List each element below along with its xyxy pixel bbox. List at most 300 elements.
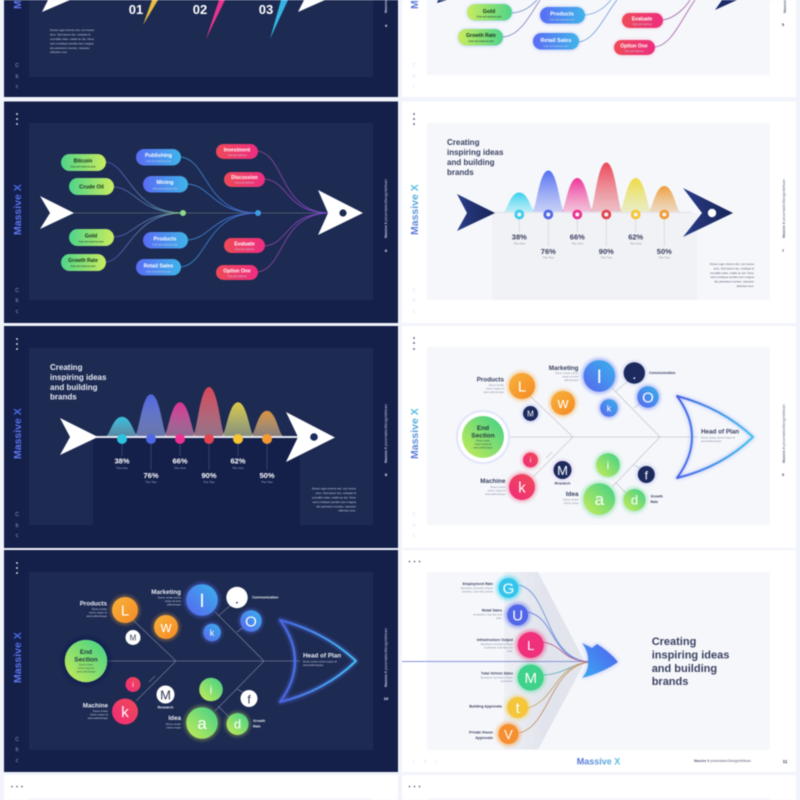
footer nav letters	[413, 759, 438, 765]
side nav letters	[412, 63, 416, 90]
label: Products: Products	[80, 600, 107, 608]
label: Employment Rate: alteration. Cras vitae pulvinar	[462, 590, 493, 594]
footer nav letters: c	[435, 759, 438, 765]
side nav letters	[412, 288, 416, 315]
label: Products: amet pellentesque	[484, 391, 505, 394]
pill: Evaluate: Cras sed maximus	[235, 248, 255, 251]
label: Research: Research	[555, 482, 570, 486]
label: Infrastructure Output: dolor.	[507, 650, 513, 653]
circle: f navy: f	[645, 468, 649, 482]
label: Building Approvals: Building Approvals	[469, 704, 502, 708]
side nav letters: b	[413, 523, 416, 529]
percentage labels: 62%	[628, 232, 644, 242]
footer tag: Massive X presentation/Design/bit/team	[782, 404, 786, 463]
footer nav letters: b	[424, 759, 427, 765]
circle: O	[238, 608, 264, 634]
fish head	[582, 643, 618, 678]
label: Communication: Communication	[649, 371, 675, 375]
percentage labels: 76%	[541, 247, 556, 256]
paragraph: dis parturient montes, nascetur	[714, 280, 754, 284]
footer tag: 6	[385, 248, 388, 253]
label: Private House Approvals: Private House	[469, 730, 493, 734]
footer tag: 8	[385, 472, 388, 477]
circle: O	[636, 384, 660, 410]
title: and building	[50, 383, 98, 392]
label: Marketing: Marketing	[151, 589, 181, 596]
side nav letters: c	[413, 533, 416, 539]
pill: Publishing	[136, 149, 181, 166]
paragraph: ridiculus mus.	[338, 508, 356, 512]
footer tag: Massive X presentation/Design/bit/team	[782, 179, 786, 238]
percentage captions	[116, 466, 273, 484]
circle: M navy	[552, 460, 573, 480]
paragraph: Donec eget viverra nisi, non luctus	[312, 486, 357, 490]
label: Products: Donec ornare	[489, 384, 505, 387]
side nav letters: b	[16, 523, 19, 529]
footer tag: 7	[782, 248, 785, 253]
pill: Option One	[216, 265, 258, 280]
circle: d green	[622, 487, 648, 513]
number 03 with cyan spike	[259, 0, 288, 39]
circle: k pink	[507, 472, 537, 502]
circle: k blue: k	[607, 404, 612, 414]
label: Head of Plan: Head of Plan	[303, 652, 341, 660]
circle: I: I	[199, 591, 205, 612]
pill: Gold	[467, 4, 512, 21]
pill: Evaluate: Evaluate	[234, 242, 255, 248]
percentage labels: 62%	[230, 456, 246, 466]
label: Machine: Donec ornare	[490, 486, 506, 489]
label: Head of Plan: Head of Plan	[701, 428, 739, 436]
label: Head of Plan: amet pellentesque	[701, 440, 722, 443]
label: Retail Sales: dolor.	[496, 617, 502, 620]
pill: Mining	[143, 176, 188, 192]
label: Infrastructure Output: Infrastructure Output	[477, 638, 514, 642]
circle: M small navy	[522, 404, 540, 422]
circle: d green: d	[234, 716, 241, 732]
label: Growth Rate: Rate	[253, 724, 261, 728]
label: Products: Products	[477, 376, 504, 384]
label: Marketing: pellentesque	[564, 379, 579, 382]
label: Total Vehicle Sales: Spectacum commodo of figure	[481, 676, 514, 680]
label: Employment Rate: Employment Rate	[463, 582, 493, 586]
title	[447, 138, 504, 177]
circle: L	[507, 371, 537, 401]
title: and building	[447, 158, 495, 167]
pill: Mining: Cras sed maximus ante	[152, 188, 178, 190]
label: Growth Rate	[253, 719, 265, 728]
circle: End Section: Donec ornare	[79, 664, 94, 666]
footer tag: 5	[782, 22, 785, 27]
number 01 with yellow spike: 01	[129, 2, 143, 17]
label: Products: amet pellentesque	[87, 615, 108, 618]
percentage labels	[512, 232, 672, 256]
circle: i green: i	[210, 684, 212, 696]
side nav letters: b	[413, 298, 416, 304]
pill: Investment	[216, 144, 258, 159]
slide: dark bump chart fishbone	[4, 326, 398, 548]
percentage captions: The Two	[601, 256, 612, 260]
circle: dot navy	[622, 361, 646, 385]
paragraph: convallis vitae, mattis ac dui. Nunc	[710, 271, 755, 275]
label: Products	[477, 376, 505, 394]
label: Idea	[563, 491, 579, 505]
pill: Bitcoin: Cras sed maximus ante	[70, 166, 96, 168]
stems	[519, 219, 664, 246]
pill: Retail Sales: Cras sed maximus ante	[146, 270, 172, 274]
side nav letters: b	[413, 74, 416, 80]
brand label: Massive X	[409, 408, 421, 459]
head outline	[677, 396, 753, 478]
label: Marketing: pellentesque	[167, 604, 182, 606]
slide: bottom left strip	[4, 775, 398, 800]
label: Growth Rate: Rate	[650, 500, 658, 504]
connector curves	[519, 585, 590, 733]
percentage labels: 90%	[201, 471, 217, 480]
circle: f white: f	[247, 692, 251, 706]
label: Marketing: Donec ornare rutrum	[158, 596, 181, 600]
label: Products	[80, 600, 108, 618]
circle: w	[152, 613, 180, 641]
label: Total Vehicle Sales	[481, 672, 514, 683]
side nav letters: c	[16, 533, 19, 539]
pill: Gold: Cras sed maximus ante	[476, 16, 502, 18]
circle: I	[184, 582, 220, 618]
paragraph: convallis vitae, mattis ac dui. Nunc	[50, 37, 95, 41]
percentage labels: 66%	[570, 232, 585, 242]
circle: dot navy: .	[632, 366, 636, 383]
title: and building	[652, 663, 717, 675]
pill: Mining: Mining	[156, 180, 174, 186]
side nav letters: c	[413, 309, 416, 315]
percentage labels: 50%	[259, 471, 275, 480]
side nav letters: C	[412, 288, 416, 294]
side nav letters: c	[16, 84, 19, 90]
brand label: Massive X	[12, 408, 24, 459]
paragraph: sed a tristique perdiet sem magna	[710, 275, 754, 279]
grey chevron band	[504, 572, 585, 750]
label: Machine: Machine	[480, 478, 506, 485]
percentage labels	[114, 456, 275, 480]
circle: M: M	[524, 670, 537, 687]
bump chart	[106, 387, 284, 436]
label: Research: Research	[158, 706, 173, 710]
grey lower band	[492, 213, 697, 300]
circle: w	[549, 389, 577, 417]
percentage captions: The One	[174, 466, 186, 470]
side nav letters: b	[16, 747, 19, 753]
percentage labels: 38%	[114, 456, 130, 466]
circle: End Section: rutrum neque sit	[78, 667, 95, 670]
paragraph	[312, 486, 357, 512]
circle: d green: d	[631, 492, 638, 508]
circle: U: U	[512, 608, 523, 624]
label: Marketing	[549, 365, 579, 382]
title: brands	[447, 168, 474, 177]
circle: O: O	[245, 614, 257, 630]
circle: f navy	[636, 464, 656, 484]
footer tag: Massive X presentation/Design/bit/team	[384, 404, 388, 463]
pill: Discussion: Cras sed maximus	[235, 182, 255, 184]
pill: Option One: Cras sed maximus	[624, 50, 644, 53]
label: Head of Plan	[303, 652, 341, 667]
label: Machine: Machine	[83, 702, 108, 710]
pill: Bitcoin: Bitcoin	[74, 158, 93, 164]
label: Idea: rutrum neque	[564, 502, 579, 505]
pill: Products	[143, 232, 188, 248]
pill: Investment: Investment	[224, 148, 251, 154]
head arrow	[683, 188, 733, 237]
footer tag	[782, 0, 787, 27]
label: Infrastructure Output: at pharetra. Cras vitae pulv	[484, 646, 514, 650]
paragraph: sed a tristique perdiet sem magna	[312, 500, 356, 504]
side nav letters	[412, 512, 416, 539]
label: Idea: Idea	[168, 715, 181, 722]
percentage captions	[513, 242, 670, 260]
pill: Publishing: Publishing	[145, 153, 172, 159]
percentage labels: 90%	[599, 247, 614, 256]
circle: L: L	[518, 378, 526, 396]
circle: I	[581, 358, 617, 394]
label: Machine: rutrum neque sit	[487, 490, 506, 492]
circle: End Section	[62, 637, 110, 685]
label: Machine	[480, 478, 506, 496]
footer tag: 10	[384, 696, 389, 701]
circle: a green	[184, 705, 220, 741]
circle: i green: i	[607, 460, 609, 472]
circle: a green: a	[595, 490, 605, 509]
paragraph: arcu. Sed ipsum leo, volutpat id	[316, 491, 356, 495]
circle: M white small: M	[130, 634, 137, 642]
circle: M white small	[126, 630, 140, 645]
pill: Growth Rate: Cras sed maximus ante	[468, 40, 494, 43]
side nav letters	[15, 737, 19, 764]
percentage captions: The One	[232, 466, 244, 470]
paragraph: Donec eget viverra nisi, non luctus	[710, 262, 755, 266]
menu dots	[16, 113, 18, 125]
circle: G	[496, 576, 521, 600]
circle: t	[505, 695, 530, 720]
fishbone lines	[107, 605, 300, 721]
brand label: Massive X	[12, 632, 24, 683]
number 02 with pink spike	[193, 0, 225, 39]
title: inspiring ideas	[652, 650, 729, 662]
side nav letters: b	[16, 74, 19, 80]
circle: i green	[199, 678, 223, 701]
tail arrow	[40, 196, 74, 229]
label: Machine: Donec ornare	[93, 710, 109, 713]
pill: Publishing: Cras sed maximus ante	[146, 160, 172, 163]
slide: bottom right strip	[402, 775, 796, 800]
side nav letters: C	[15, 288, 19, 294]
label: Marketing: Donec ornare rutrum	[555, 372, 578, 375]
circle: End Section: Section	[74, 656, 98, 664]
menu dots	[413, 113, 415, 125]
pill: Option One: Option One	[620, 44, 648, 50]
label: Idea: rutrum neque	[166, 726, 182, 730]
menu dots	[11, 786, 23, 787]
label: Retail Sales: Retail Sales	[482, 608, 502, 612]
pill: Retail Sales	[533, 33, 579, 50]
circle: d green	[224, 711, 250, 737]
spine	[92, 436, 298, 438]
footer tag: Massive X presentation/Design/bit/team	[694, 759, 751, 763]
footer tag: 9	[782, 472, 785, 477]
label: Idea: Donec ornare	[166, 723, 182, 726]
number 01 with yellow spike	[129, 0, 158, 25]
pill: Products: Cras sed maximus ante	[152, 244, 178, 246]
spine	[490, 212, 692, 214]
label: Products: rutrum neque sit	[89, 612, 107, 614]
circle: End Section	[457, 411, 509, 463]
menu dots	[409, 786, 420, 787]
title: Creating	[652, 636, 696, 648]
slide: dark mind map fishbone	[4, 102, 398, 323]
circle: k pink: k	[121, 704, 129, 721]
circle: f white	[240, 690, 258, 707]
circle: i red small: i	[530, 458, 532, 464]
paragraph: sed a tristique perdiet sem magna	[50, 42, 94, 46]
arrow tail fragment	[42, 0, 70, 12]
title	[652, 636, 729, 688]
percentage captions: The Two	[261, 480, 273, 484]
label: Idea: Idea	[566, 491, 579, 498]
circle: M	[516, 662, 546, 692]
pill: Growth Rate	[458, 29, 503, 46]
percentage labels: 76%	[143, 471, 159, 480]
circle: k blue	[598, 398, 620, 418]
circle: a green: a	[197, 714, 207, 733]
percentage captions: The Two	[145, 480, 157, 484]
circle: i red small	[126, 677, 140, 692]
side nav letters: C	[15, 737, 19, 743]
brand label: Massive X	[12, 184, 24, 235]
paragraph: dis parturient montes, nascetur	[50, 46, 90, 50]
circle: O: O	[642, 390, 654, 406]
label: Retail Sales	[473, 608, 503, 620]
percentage captions: The One	[116, 466, 128, 470]
pill: Retail Sales	[136, 259, 181, 276]
fishbone lines	[500, 381, 698, 497]
side nav letters: c	[16, 309, 19, 315]
tail and head fragments	[437, 0, 737, 10]
footer tag	[384, 0, 388, 28]
circle: End Section: End	[477, 425, 489, 432]
side nav letters: C	[15, 512, 19, 518]
pill: Gold	[69, 229, 114, 246]
head arrow	[318, 190, 363, 235]
pill: Retail Sales: Retail Sales	[541, 38, 571, 44]
label: Private House Approvals: Approvals	[475, 736, 493, 740]
circle: V	[496, 722, 521, 746]
slide: light circle fishbone	[402, 326, 796, 548]
circle: End Section: End	[80, 649, 92, 656]
pill: Retail Sales: Retail Sales	[144, 264, 173, 270]
pill: Crude Oil: Crude Oil	[79, 184, 104, 190]
menu dots	[16, 562, 18, 574]
footer tag: Massive X presentation/Design/bit/team	[384, 179, 388, 238]
footer tag: Massive X presentation/Design/bit/team	[384, 628, 388, 687]
label: Infrastructure Output: Spectacum commodo of figure	[481, 643, 514, 646]
circle: End Section: amet pellentesque	[474, 446, 493, 450]
circle: k blue: k	[210, 628, 215, 638]
label: Employment Rate	[461, 582, 494, 594]
percentage captions: The One	[571, 242, 583, 246]
title: inspiring ideas	[50, 373, 107, 382]
spine	[72, 212, 325, 214]
paragraph: ridiculus mus.	[736, 284, 754, 288]
side nav letters: c	[16, 758, 19, 764]
label: Marketing	[151, 589, 182, 606]
head arrow	[286, 412, 335, 462]
footer brand: Massive X	[577, 756, 620, 766]
percentage labels: 38%	[512, 232, 527, 242]
circle: M navy: M	[557, 463, 568, 478]
pill: Products: Products	[550, 12, 574, 18]
label: Idea	[166, 715, 182, 730]
percentage captions: The Two	[203, 480, 215, 484]
pill: Investment: Cras sed maximus	[227, 154, 247, 157]
paragraph	[710, 262, 755, 288]
label: Growth Rate	[650, 494, 663, 504]
head outline	[280, 620, 356, 702]
label: Communication: Communication	[252, 596, 278, 600]
label: Head of Plan	[701, 428, 739, 443]
paragraph: Donec eget viverra nisi, non luctus	[50, 28, 95, 32]
pill: Evaluate: Cras sed maximus	[632, 23, 652, 26]
tail arrow	[60, 418, 98, 455]
title	[50, 363, 107, 402]
paragraph	[50, 28, 95, 54]
pill: Retail Sales: Cras sed maximus ante	[543, 45, 569, 48]
label: Growth Rate: Growth	[650, 494, 663, 498]
circle: k pink: k	[518, 480, 526, 496]
circle: L: L	[121, 602, 129, 620]
side nav letters	[15, 288, 19, 315]
arrow head fragment	[298, 0, 325, 12]
label: Idea: Donec ornare	[563, 498, 579, 502]
pill: Evaluate	[622, 13, 663, 28]
label: Machine	[83, 702, 109, 720]
circle: i green	[594, 452, 622, 478]
label: Head of Plan: amet pellentesque	[303, 664, 324, 667]
circle: w: w	[557, 395, 569, 412]
slide: light fish cause diagram	[402, 550, 796, 772]
menu dots	[413, 337, 415, 350]
circle: k blue	[202, 622, 222, 643]
percentage labels: 50%	[657, 247, 672, 256]
pill: Products	[540, 7, 585, 24]
label: Machine: amet pellentesque	[88, 717, 109, 720]
side nav letters: C	[412, 512, 416, 518]
pill: Option One: Option One	[223, 268, 251, 274]
circle: L	[110, 595, 140, 625]
pill: Growth Rate: Cras sed maximus ante	[70, 265, 96, 268]
lower dark band	[93, 437, 300, 525]
side nav letters: c	[413, 84, 416, 90]
label: Private House Approvals	[469, 730, 493, 740]
label: Total Vehicle Sales: at pharetra.	[501, 680, 513, 683]
circle: dot white	[226, 587, 248, 608]
circle: End Section: Donec ornare	[476, 440, 491, 442]
label: Total Vehicle Sales: Total Vehicle Sales	[481, 672, 513, 676]
circle: End Section: amet pellentesque	[77, 670, 96, 674]
footer tag: 4	[385, 23, 388, 28]
circle: U	[505, 602, 531, 628]
menu dots	[409, 561, 420, 562]
circle: M white	[156, 686, 174, 704]
pill: Products: Cras sed maximus ante	[549, 18, 575, 22]
